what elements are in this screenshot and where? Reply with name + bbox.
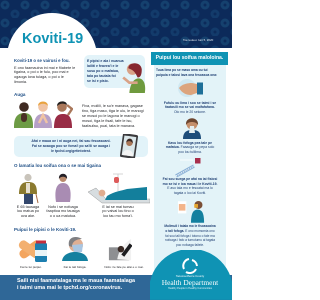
- icon: washing hands: [178, 79, 203, 97]
- tip: get tested: tagata o loo iai Koviti.: [174, 191, 206, 195]
- tip: get tested: Fai sou suega pe afai na iai fisiosi: [163, 177, 217, 181]
- intro text: tigaina, o poi o le fulu, poo mai e: [14, 70, 69, 74]
- tip: sanitize surfaces: nofoaga i fafo a tumutumu ai tagata: [165, 238, 215, 242]
- department name: Health Department: [162, 278, 218, 287]
- intro to tips: puipuia e talosi lava ona fesoasoa ona:: [156, 73, 217, 77]
- tip: wash hands: Olo mo le 20 sekone.: [174, 110, 206, 114]
- panel: stay healthy: [154, 52, 226, 275]
- callout: anyone can get sick: E pipisi e ala i nuanua: [87, 59, 124, 63]
- callout: call your doctor: [14, 136, 148, 157]
- footer text: [17, 278, 136, 291]
- tip: get tested: [162, 177, 218, 195]
- caption: Nofo i se nofoaga: [48, 204, 78, 208]
- tip: sanitize surfaces: [164, 224, 216, 247]
- caption: stay apart: Nofo i le fale pe afai e o mai.: [104, 265, 144, 269]
- tagline: Healthy People in Healthy Communities: [168, 287, 212, 290]
- risk groups heading: O lamatia lou soifua ona o se mai tigaina: [14, 163, 101, 168]
- risk: older adults: [17, 174, 40, 218]
- tip: cover face: Kavu lou fofoga pea tale pe: [168, 140, 212, 144]
- symptoms text: se mosoi po le lagona le manogi o: [82, 114, 140, 118]
- icon: sanitizer and masked person: [178, 201, 204, 223]
- tip: get tested: E aso tala mo e fesoatai ma lo: [167, 186, 213, 190]
- icon: person in crook of elbow: [108, 240, 132, 260]
- tip: cover face: [166, 140, 214, 154]
- caption: E iai se mai tumau: [102, 204, 134, 208]
- callout: call your doctor: Afai e maua oe i ni auga nei, fai sau fesoasoani.: [31, 139, 111, 143]
- prevention heading: Puipui le pipisi o le Koviti-19.: [14, 226, 76, 232]
- tip: sanitize surfaces: fai sou tali fofoga i totonu o fale ma: [165, 234, 215, 238]
- caption: [46, 204, 80, 218]
- footer text: i taimi uma mai le tpchd.org/coronavirus.: [17, 285, 122, 291]
- caption: vaccine: Fai le tui puipui.: [20, 265, 42, 269]
- agency name: Tacoma-Pierce County: [176, 274, 204, 278]
- icon: bandage and vaccine: [18, 240, 47, 262]
- callout: anyone can get sick: susu po o mafatua,: [87, 69, 119, 73]
- tip: wash hands: [164, 100, 216, 114]
- symptoms text: tino, tiga maso, tiga le ulu, le manogi: [82, 108, 144, 112]
- header band: [0, 0, 232, 48]
- caption: faapitoa mo tausiga: [46, 209, 80, 213]
- callout: anyone can get sick: tala po tautala foi: [87, 74, 116, 78]
- intro to tips: Tuua lima po se maso ama ou tui: [156, 68, 208, 72]
- symptoms heading: Auga: [14, 92, 25, 96]
- caption: ova ake.: [21, 214, 35, 218]
- intro text: Koviti-19 o se vairusi e fou.: [14, 58, 70, 63]
- callout: anyone can get sick: lailiti e feavea'i e le: [87, 64, 118, 68]
- callout: call your doctor: le tpchd.org/getintotest.: [51, 149, 91, 153]
- footer band: [0, 275, 232, 300]
- tip: get tested: mo se isi e ioa maua i le Koviti-19.: [163, 182, 217, 186]
- tip: sanitize surfaces: poo nofoaga faitele.: [176, 243, 204, 247]
- icon: doctor on tablet: [120, 134, 138, 158]
- caption: lou matua po: [17, 209, 39, 213]
- caption: E 65 tausaga: [17, 204, 39, 208]
- caption: [17, 204, 40, 218]
- revision date: Toe teuteu: Iuni 5, 2020: [183, 38, 213, 42]
- risk: existing illness: [88, 174, 150, 218]
- panel heading: Puipui lou soifua maloloina.: [156, 55, 223, 61]
- health department badge: [150, 250, 232, 300]
- intro text: ogaoga lona tulaga, o poi o le: [14, 75, 64, 79]
- tip: sanitize surfaces: Mulimuli i taiala mo le fisoasoaina: [164, 224, 216, 228]
- icon: person coughing: [122, 63, 146, 93]
- tip: wash hands: faatasili mo se vai maifafafana.: [165, 105, 215, 109]
- intro to tips: [156, 68, 217, 77]
- caption: loo tau mo foma'i.: [103, 214, 133, 218]
- symptoms text: Fiva, moilili, le su'e manava, gagase: [82, 104, 143, 108]
- icon: thermometer and drop: [175, 158, 200, 178]
- tip: cover face: mafatua. Faaaoga se pepa solo: [166, 145, 214, 149]
- icon: person covering face: [183, 118, 201, 139]
- footer text: Saili nisi faamatalaga ma le maua faamatalaga: [17, 278, 135, 284]
- icon: patient in bed: [88, 174, 150, 204]
- symptoms text: [82, 104, 144, 128]
- intro text: [14, 58, 75, 84]
- callout: anyone can get sick: se isi e pisio.: [87, 79, 109, 83]
- caption: o o ua matutua.: [50, 214, 76, 218]
- tip: sanitize surfaces: o tali fofoga. E ono momomia ono: [165, 229, 215, 233]
- tip: cover face: poo lou tulilima.: [178, 150, 202, 154]
- panel heading: [151, 52, 228, 65]
- caption: wear mask: Fai le tali fofoga.: [64, 265, 86, 269]
- icon: older man: [19, 174, 38, 204]
- intro text: limonia.: [14, 80, 27, 84]
- callout: anyone can get sick: [84, 55, 145, 88]
- icon: pregnant woman: [55, 174, 71, 202]
- intro text: E ono faamauina ini mai e fiiabete le: [14, 66, 75, 70]
- symptoms text: mosoi, tiga le fisaii, tafe le isu,: [82, 118, 132, 122]
- symptoms text: faafaufau, puai, tata le manava.: [82, 124, 135, 128]
- caption: [102, 204, 134, 218]
- tip: wash hands: Fufulu ou lima i soo se taimi i se: [164, 100, 216, 104]
- logo icon: [182, 258, 198, 274]
- title: Koviti-19: [22, 31, 83, 47]
- title circle: [8, 13, 96, 48]
- risk: pregnant: [46, 174, 80, 218]
- caption: po vaivai lou tino o: [102, 209, 134, 213]
- callout: call your doctor: Fai se aoaoga poo se foma'i po sa'ili se auaga i: [32, 144, 110, 148]
- icon: person wearing mask: [62, 237, 88, 261]
- illustration: three people with symptoms: [14, 101, 73, 128]
